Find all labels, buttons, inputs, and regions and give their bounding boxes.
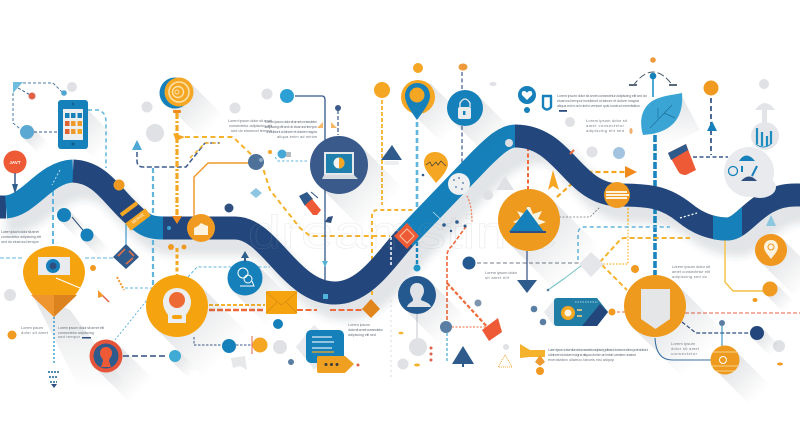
orange pointer bbox=[98, 277, 124, 302]
road segment: navy right bbox=[515, 136, 800, 229]
text block: Lorem ipsum dolor sit amet consectetur adipiscing elit sed do eiusmod tempor incididunt bbox=[548, 347, 649, 352]
text block bbox=[557, 93, 648, 112]
leaf bbox=[641, 93, 700, 145]
text block bbox=[1, 229, 42, 244]
text block bbox=[672, 264, 711, 279]
chat icon bbox=[296, 325, 354, 373]
text block: dolor sit amet bbox=[671, 346, 700, 351]
text block: Lorem ipsum dolor sit bbox=[672, 264, 711, 269]
user search circle bbox=[228, 251, 293, 326]
text block: Lorem ipsum bbox=[21, 325, 44, 330]
pale diamond bbox=[250, 188, 262, 198]
blue-gray node bbox=[440, 321, 452, 333]
navy dot bbox=[224, 204, 234, 212]
text block: aliqua enim ad minim veniam quis nostrud exercitation bbox=[557, 103, 640, 108]
gold triangle bbox=[498, 355, 512, 367]
text block: sit amet elit bbox=[485, 275, 510, 280]
connector lines bbox=[0, 72, 800, 380]
blue ball with gold ball bbox=[222, 336, 268, 370]
icon: phone bbox=[58, 100, 116, 159]
text block: amet consectetur bbox=[586, 123, 625, 128]
text block: adipiscing sed do bbox=[672, 274, 708, 279]
text block: Lorem ipsum bbox=[348, 322, 371, 327]
small orange dots bbox=[8, 244, 186, 340]
road segment: left blue bbox=[6, 171, 73, 207]
text block: Lorem ipsum dolor sit amet bbox=[1, 229, 40, 234]
small balls bbox=[273, 319, 360, 366]
text block bbox=[485, 270, 518, 280]
pin badge bbox=[755, 234, 800, 297]
small slate dots bbox=[531, 289, 549, 325]
navy node bbox=[462, 256, 476, 270]
text block bbox=[348, 322, 384, 337]
patterned orange ball bbox=[710, 346, 770, 405]
blue up arrow bbox=[707, 121, 717, 131]
gold triangles bbox=[317, 105, 341, 128]
text block bbox=[21, 325, 49, 335]
envelope bbox=[266, 291, 297, 314]
gray diamond bbox=[579, 252, 604, 277]
road stripes: MERGE bbox=[131, 212, 145, 225]
shield circle bbox=[624, 275, 726, 377]
gold arrow bbox=[520, 344, 545, 358]
laptop circle bbox=[310, 136, 403, 229]
text block: consectetur adipiscing bbox=[58, 330, 94, 335]
chart pin bbox=[424, 152, 448, 183]
text block bbox=[228, 118, 273, 133]
text block: sed do eiusmod tempor bbox=[231, 128, 273, 133]
speckled circle bbox=[448, 173, 470, 195]
text block: amet consectetur elit bbox=[672, 269, 711, 274]
navy diamond bbox=[113, 244, 139, 269]
text block bbox=[586, 118, 628, 133]
cloud circle bbox=[187, 214, 215, 242]
text block bbox=[671, 341, 700, 356]
gray dots bbox=[4, 79, 785, 370]
leaf stem and top bbox=[629, 57, 677, 97]
orange arrow bbox=[625, 166, 637, 178]
blue ball bbox=[280, 89, 294, 103]
road segment: left navy bbox=[0, 196, 6, 218]
text block: exercitation ullamco laboris nisi aliquip bbox=[548, 357, 615, 362]
light blue ball bbox=[169, 350, 198, 379]
lock circle bbox=[447, 90, 513, 156]
blue gray circle bbox=[248, 154, 264, 170]
lollipop icon bbox=[160, 78, 224, 139]
road segment: navy valley bbox=[163, 228, 405, 293]
light arrow bbox=[766, 215, 776, 226]
text block: Lorem ipsum dolor bbox=[485, 270, 518, 275]
road segment: blue rise bbox=[405, 136, 516, 238]
location pin bbox=[401, 80, 465, 142]
orange ball bbox=[704, 80, 718, 96]
road shadow bbox=[6, 151, 800, 308]
text block: adipiscing elit sed bbox=[348, 332, 376, 337]
balls bbox=[57, 208, 110, 258]
icon: blue ball bbox=[20, 125, 49, 154]
bulb circle bbox=[146, 275, 248, 377]
gray tools blob bbox=[751, 103, 779, 150]
small red dots and ovals bbox=[398, 332, 432, 366]
navy down arrow bbox=[517, 251, 537, 293]
gray node bbox=[474, 300, 482, 306]
red cup bbox=[668, 144, 696, 175]
text block: Lorem ipsum dolor sit amet consectetur bbox=[265, 119, 318, 124]
text block: incididunt ut labore et dolore magna bbox=[267, 129, 318, 134]
navy ball bbox=[750, 326, 780, 356]
orange ball bbox=[762, 282, 794, 312]
road segment: blue link bbox=[137, 218, 164, 228]
text block: dolor sit amet bbox=[21, 330, 49, 335]
lollipop stem bbox=[172, 113, 185, 224]
navy triangle bbox=[381, 145, 402, 165]
red badge: JAVT bbox=[9, 160, 21, 165]
icon: corner triangle bbox=[13, 82, 23, 93]
orange top dot bbox=[413, 63, 423, 73]
gold spike bbox=[548, 170, 559, 190]
text block: sed do eiusmod tempor bbox=[1, 239, 40, 244]
orange ball bbox=[374, 82, 390, 98]
colored dots bbox=[570, 128, 633, 159]
orange diamond bbox=[362, 299, 380, 318]
road stripes bbox=[52, 139, 697, 299]
road segment: navy crest bbox=[73, 171, 140, 221]
text block bbox=[58, 325, 105, 339]
capsule arrow bbox=[299, 192, 333, 223]
text block: consectetur bbox=[671, 351, 698, 356]
red arrow bbox=[482, 318, 502, 341]
large orange mountain circle bbox=[498, 189, 600, 291]
large map pin bbox=[23, 246, 130, 390]
tag bbox=[544, 298, 608, 326]
watermark: dreamstime bbox=[248, 206, 558, 258]
road bbox=[0, 136, 800, 293]
icon: small blue notch bbox=[61, 90, 67, 96]
text block: sed tempor bbox=[58, 334, 81, 339]
text block: adipiscing elit sed bbox=[586, 128, 624, 133]
text block: Lorem ipsum dolor sit amet consectetur adipiscing elit sed do bbox=[557, 93, 648, 98]
text block: dolor sit amet consectetur bbox=[348, 327, 384, 332]
blue node bbox=[414, 264, 420, 272]
heart badge bbox=[518, 86, 536, 113]
avatar badge bbox=[90, 340, 153, 403]
orange top dot bbox=[458, 64, 468, 70]
text block: ut labore et dolore magna aliqua ut enim ad minim veniam nostrud bbox=[548, 352, 636, 357]
gray icon circle bbox=[724, 147, 776, 198]
mini nodes bbox=[268, 150, 291, 158]
text block: Lorem ipsum dolor sit amet elit bbox=[58, 325, 105, 330]
magnet icon bbox=[542, 96, 552, 110]
person circle bbox=[398, 276, 466, 344]
small navy dots near road bbox=[422, 174, 466, 232]
orange tag dot bbox=[608, 308, 616, 316]
text block bbox=[548, 347, 649, 362]
text block: eiusmod tempor incididunt ut labore et dolore magna bbox=[557, 98, 640, 103]
lower orange shapes bbox=[535, 355, 545, 375]
text block: consectetur adipiscing elit bbox=[1, 234, 42, 239]
icon: red dot bbox=[28, 92, 36, 100]
road segment: blue trough bbox=[713, 206, 742, 240]
blue gray dot bbox=[719, 320, 725, 326]
orange-red route end bbox=[467, 196, 472, 222]
red diamond bbox=[394, 223, 419, 249]
navy tree bbox=[452, 346, 474, 367]
gold vertical bbox=[627, 208, 629, 220]
bottom arrow bbox=[48, 372, 59, 388]
text block: consectetur adipiscing elit bbox=[229, 123, 273, 128]
blue arrow up bbox=[132, 140, 142, 150]
text block bbox=[265, 119, 318, 139]
text block: aliqua enim ad minim bbox=[277, 134, 318, 139]
text block: Lorem ipsum dolor sit bbox=[586, 118, 628, 123]
small orange bbox=[631, 265, 783, 366]
red badge bbox=[4, 150, 26, 194]
pale arrow on line bbox=[322, 261, 328, 267]
text block: Lorem ipsum bbox=[671, 341, 696, 346]
orange hand circle bbox=[604, 182, 630, 208]
text block: Lorem ipsum dolor sit amet bbox=[228, 118, 273, 123]
text block: adipiscing elit sed do eiusmod tempor bbox=[265, 124, 318, 129]
